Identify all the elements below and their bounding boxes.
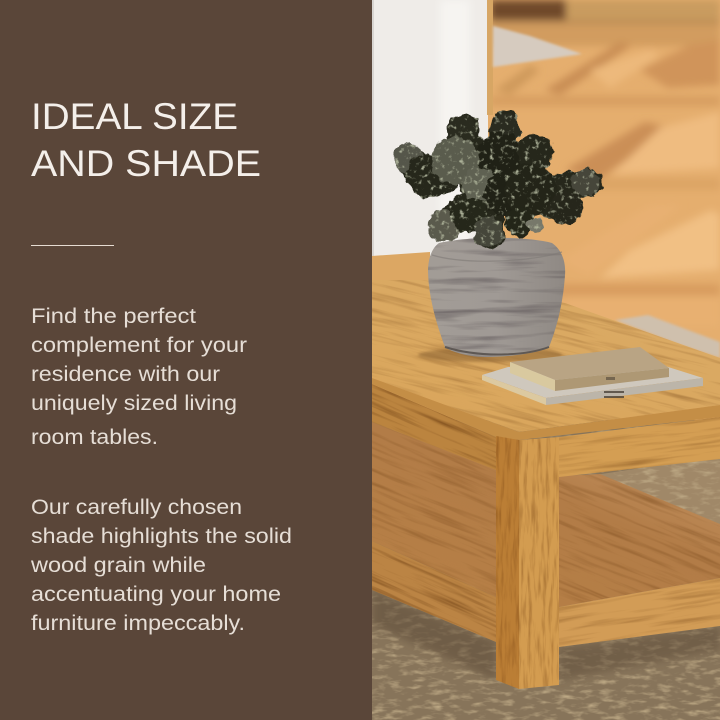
text block: first paragraph: room tables. xyxy=(31,426,158,449)
panel: brown text panel xyxy=(0,0,372,720)
rug: far light rug corner xyxy=(615,315,720,358)
icon: stack of books xyxy=(482,347,703,405)
table: lower shelf xyxy=(372,422,720,607)
coffee table xyxy=(372,280,720,689)
text block: second paragraph xyxy=(30,496,292,635)
text block: second paragraph: shade highlights the solid xyxy=(31,525,292,548)
vase shadow xyxy=(418,348,562,362)
rug: floor rug under table xyxy=(372,420,720,720)
text block: second paragraph: furniture impeccably. xyxy=(31,612,245,635)
text block: second paragraph: wood grain while xyxy=(30,554,206,577)
table: tabletop edge xyxy=(372,378,720,440)
text block: first paragraph: Find the perfect xyxy=(31,305,196,328)
text block: second paragraph: accentuating your home xyxy=(31,583,281,606)
divider rule xyxy=(31,245,114,246)
table: tabletop surface xyxy=(372,280,720,432)
text block: first paragraph xyxy=(31,305,247,449)
table: lower right apron xyxy=(559,578,720,647)
title xyxy=(31,96,261,184)
text block: first paragraph: uniquely sized living xyxy=(31,392,237,415)
table: leg front face xyxy=(519,437,559,689)
table: upper left apron xyxy=(372,384,496,470)
text block: second paragraph: Our carefully chosen xyxy=(31,496,242,519)
lower light book xyxy=(482,366,703,398)
title: AND SHADE xyxy=(31,143,261,184)
icon: dark leafy plant xyxy=(393,115,599,247)
table: leg side face xyxy=(496,436,519,689)
table: upper right apron xyxy=(559,417,720,477)
upper tan book xyxy=(510,347,669,380)
photo: room background xyxy=(372,0,720,420)
icon: ceramic vase xyxy=(428,238,565,357)
text block: first paragraph: residence with our xyxy=(31,363,220,386)
title: IDEAL SIZE xyxy=(31,96,238,137)
text block: first paragraph: complement for your xyxy=(31,334,247,357)
table: lower left apron xyxy=(372,541,496,642)
